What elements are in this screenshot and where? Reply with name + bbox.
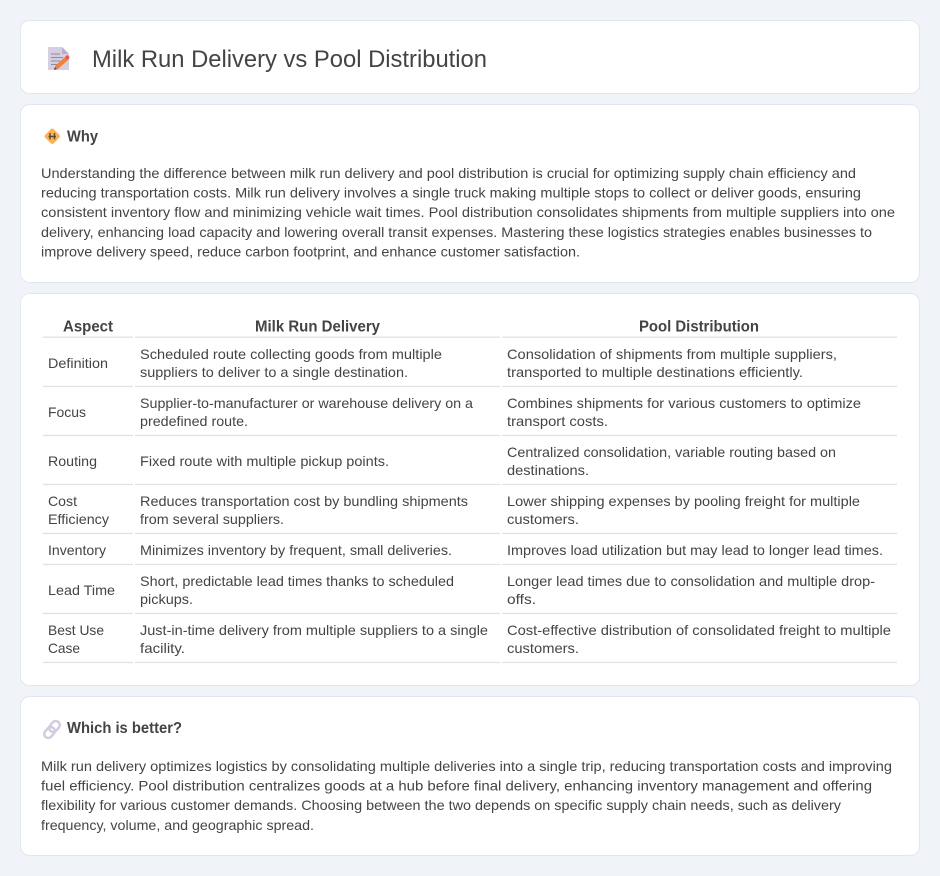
table row: lead time: pickups. [140, 591, 193, 607]
table row: inventory: Minimizes inventory by frequent, small deliveries. [140, 542, 452, 558]
table row: lead time [48, 573, 875, 607]
text block: why paragraph: delivery, enhancing load capacity and lowering overall transit expenses. Mastering these logistics strategies enables businesses to [41, 224, 872, 240]
table header row: Milk Run Delivery [255, 318, 380, 336]
table header row: Pool Distribution [639, 318, 759, 336]
table row: best use case: Cost-effective distribution of consolidated freight to multiple [507, 622, 891, 638]
text block: why paragraph: Understanding the difference between milk run delivery and pool distribution is crucial for optimizing supply chain efficiency and [41, 165, 856, 181]
table row: best use case: Best Use [48, 622, 104, 638]
table row: definition [48, 346, 837, 380]
table row: definition: Consolidation of shipments from multiple suppliers, [507, 346, 837, 362]
text block: which is better paragraph: frequency, volume, and geographic spread. [41, 817, 314, 833]
table row: routing: destinations. [507, 462, 589, 478]
heading: which is better: Which is better? [67, 720, 182, 737]
panel: title header [20, 20, 920, 94]
table header row: Aspect [63, 318, 114, 336]
table row: definition: suppliers to deliver to a single destination. [140, 364, 408, 380]
icon: document with pencil [48, 47, 70, 70]
panel: comparison table [20, 294, 920, 686]
table row: focus: Combines shipments for various customers to optimize [507, 395, 861, 411]
table row: inventory: Improves load utilization but may lead to longer lead times. [507, 542, 883, 558]
text block: why paragraph: consistent inventory flow and minimizing vehicle wait times. Pool distribution consolidates shipments from multiple suppliers into one [41, 204, 895, 220]
table row: cost efficiency [48, 493, 860, 527]
table header row [63, 318, 759, 336]
table row: focus: predefined route. [140, 413, 248, 429]
text block: which is better paragraph: Milk run delivery optimizes logistics by consolidating multiple deliveries into a single trip, reducing transportation costs and improving [41, 758, 892, 774]
panel: why [20, 104, 920, 282]
icon: warning diamond [44, 128, 61, 145]
text block: why paragraph: reducing transportation costs. Milk run delivery involves a single truck making multiple stops to collect or deliver goods, ensuring [41, 185, 861, 201]
table row: focus [48, 395, 861, 429]
text block: which is better paragraph [41, 758, 892, 833]
text block: which is better paragraph: flexibility for various customer demands. Choosing between the two depends on specific supply chain needs, such as delivery [41, 797, 841, 813]
title: Milk Run Delivery vs Pool Distribution [92, 46, 487, 73]
table row: focus: Supplier-to-manufacturer or warehouse delivery on a [140, 395, 473, 411]
table row: best use case: customers. [507, 640, 579, 656]
table row: cost efficiency: Cost [48, 493, 77, 509]
table row: best use case: facility. [140, 640, 185, 656]
table row: cost efficiency: customers. [507, 511, 579, 527]
table row: best use case [48, 622, 891, 656]
table row: cost efficiency: Efficiency [48, 511, 109, 527]
table row: cost efficiency: Reduces transportation cost by bundling shipments [140, 493, 468, 509]
table row: focus: Focus [48, 404, 86, 420]
table row: routing: Routing [48, 453, 97, 469]
table row: definition: Definition [48, 355, 108, 371]
text block: which is better paragraph: fuel efficiency. Pool distribution centralizes goods at a hub before final delivery, enhancing inventory management and offering [41, 778, 872, 794]
table row: lead time: Lead Time [48, 582, 115, 598]
icon: chain link [43, 719, 61, 740]
table row: focus: transport costs. [507, 413, 608, 429]
panel: which is better [20, 696, 920, 856]
text block: why paragraph: improve delivery speed, reduce carbon footprint, and enhance customer satisfaction. [41, 243, 580, 259]
table row: lead time: offs. [507, 591, 536, 607]
table row: routing [48, 444, 836, 478]
table row: inventory [48, 542, 883, 558]
table row: routing: Centralized consolidation, variable routing based on [507, 444, 836, 460]
table row: cost efficiency: Lower shipping expenses by pooling freight for multiple [507, 493, 860, 509]
heading: why: Why [67, 128, 98, 146]
table row: definition: Scheduled route collecting goods from multiple [140, 346, 442, 362]
table row: best use case: Just-in-time delivery from multiple suppliers to a single [140, 622, 488, 638]
table row: lead time: Longer lead times due to consolidation and multiple drop- [507, 573, 875, 589]
table row: routing: Fixed route with multiple pickup points. [140, 453, 389, 469]
table row: lead time: Short, predictable lead times thanks to scheduled [140, 573, 454, 589]
table row: best use case: Case [48, 640, 80, 656]
table row: cost efficiency: from several suppliers. [140, 511, 284, 527]
table row: inventory: Inventory [48, 542, 106, 558]
table row: definition: transported to multiple destinations efficiently. [507, 364, 803, 380]
text block: why paragraph [41, 165, 895, 259]
